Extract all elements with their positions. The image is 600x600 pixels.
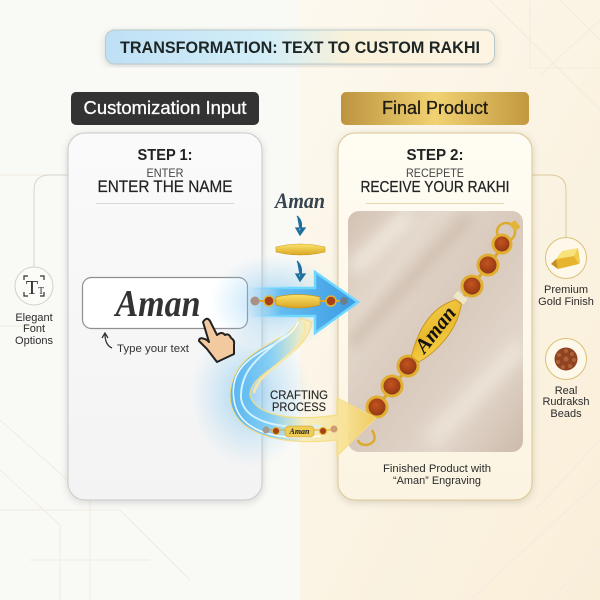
icon: gold bar [546, 238, 586, 278]
heading: Final Product [341, 92, 529, 125]
icon: blank gold plate [276, 244, 325, 255]
step 2 title: RECEIVE YOUR RAKHI [360, 179, 510, 196]
label: crafting process: PROCESS [272, 402, 326, 414]
step 2 small label: RECEPETE [406, 168, 464, 180]
panel: customization input [68, 133, 262, 500]
bracelet: Aman [408, 301, 461, 359]
arrow: name to plate [296, 216, 305, 235]
product photo: bracelet on silk [348, 211, 523, 452]
flow: swirling ribbon into gold arrow [230, 318, 376, 456]
step 1 small label: ENTER [146, 168, 184, 180]
bracelet [358, 220, 521, 445]
icon: font size [15, 267, 53, 305]
flow: upper blue arrow [210, 254, 358, 350]
label: crafting process [270, 390, 328, 414]
feature: premium gold finish: Gold Finish [538, 296, 594, 308]
step 1 title: ENTER THE NAME [98, 178, 232, 196]
name script: Aman [273, 188, 325, 213]
label: type your text [102, 333, 189, 355]
bracelet segment on gold arrow [262, 426, 338, 437]
label: crafting process: CRAFTING [270, 390, 328, 402]
heading: Customization Input: Customization Input [84, 98, 246, 118]
feature: real rudraksh beads [542, 338, 590, 420]
feature: real rudraksh beads: Beads [550, 408, 582, 420]
icon: font size: T [26, 277, 38, 299]
caption: finished product: “Aman” Engraving [393, 475, 481, 487]
icon: font size: T [38, 286, 44, 297]
title: TRANSFORMATION: TEXT TO CUSTOM RAKHI [120, 39, 480, 57]
feature: premium gold finish: Premium [544, 284, 588, 296]
heading: Customization Input [71, 92, 259, 125]
feature: elegant font options [15, 267, 53, 347]
icon: pointing hand [199, 319, 234, 362]
caption: finished product: Finished Product with [383, 463, 491, 475]
feature: elegant font options: Elegant [15, 312, 53, 324]
icon: rudraksh bead [546, 338, 586, 380]
feature: real rudraksh beads: Rudraksh [542, 396, 590, 408]
glow behind flow [190, 323, 310, 467]
feature: elegant font options: Options [15, 335, 53, 347]
step 1 heading: STEP 1: [138, 147, 192, 164]
feature: elegant font options: Font [23, 323, 45, 335]
connector: left feature line [34, 175, 68, 268]
heading: Final Product: Final Product [382, 98, 488, 118]
bracelet segment on blue arrow [250, 294, 348, 308]
connector: right feature line [532, 175, 566, 238]
panel: final product [338, 133, 532, 500]
arrow: plate to bracelet [296, 261, 305, 281]
bracelet segment on gold arrow: Aman [288, 427, 310, 436]
caption: finished product [383, 463, 491, 487]
input box: typed name [82, 278, 248, 328]
step 2 heading: STEP 2: [406, 147, 464, 164]
label: type your text: Type your text [117, 343, 189, 355]
title [106, 30, 494, 64]
feature: real rudraksh beads: Real [555, 385, 577, 397]
feature: premium gold finish [538, 238, 594, 308]
input box: typed name: Aman [114, 283, 200, 325]
